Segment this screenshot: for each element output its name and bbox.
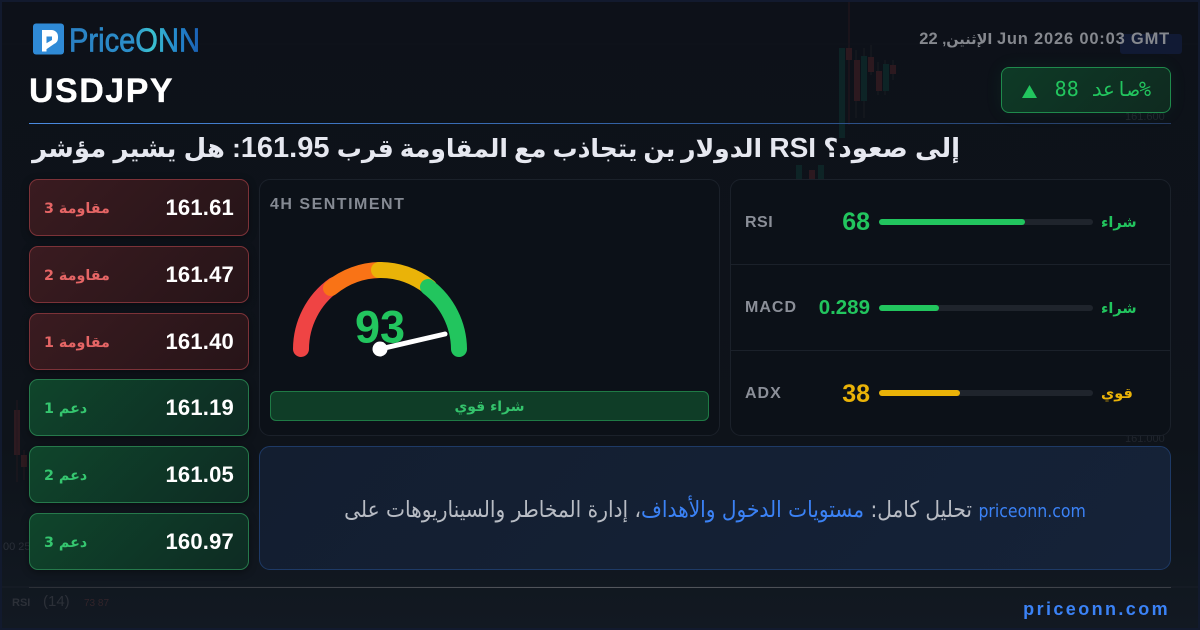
faint candlestick chart backdrop: 73 87 — [84, 598, 109, 609]
faint candlestick chart backdrop: 00 25 — [3, 541, 31, 553]
header divider — [29, 123, 1171, 124]
ADX row — [745, 380, 1133, 408]
footer divider — [29, 587, 1171, 588]
support 2: 161.05 — [166, 462, 234, 487]
ADX row: ADX — [745, 385, 782, 402]
resistance 2 — [29, 246, 249, 303]
resistance 1: 161.40 — [166, 329, 234, 354]
sentiment gauge — [293, 262, 467, 357]
MACD row: 0.289 — [819, 296, 870, 319]
panel: call to action — [259, 446, 1171, 570]
trend badge: %صاعد 88 — [1055, 77, 1151, 101]
support 3: 160.97 — [166, 529, 234, 554]
resistance 2: 161.47 — [166, 262, 234, 287]
resistance 1 — [29, 313, 249, 370]
support 1: 161.19 — [166, 395, 234, 420]
RSI row: 68 — [842, 208, 870, 236]
support 3 — [29, 513, 249, 570]
ADX row: 38 — [842, 380, 870, 408]
resistance 3 — [29, 179, 249, 236]
MACD row: MACD — [745, 299, 797, 316]
resistance 3: 161.61 — [166, 195, 234, 220]
panel: resistance and support levels — [28, 179, 249, 570]
support 3: دعم 3 — [44, 535, 87, 551]
gauge value: 93 — [355, 302, 405, 352]
sentiment label: strong buy — [270, 391, 709, 421]
support 1 — [29, 379, 249, 436]
support 2: دعم 2 — [44, 468, 87, 484]
resistance 1: مقاومة 1 — [44, 335, 110, 351]
date: 22 الإثنين, Jun 2026 00:03 GMT — [919, 30, 1170, 48]
MACD row — [731, 265, 1170, 351]
sentiment label: strong buy: شراء قوي — [454, 399, 525, 415]
footer url: priceonn.com — [1023, 599, 1170, 619]
ADX row: قوي — [1101, 386, 1133, 402]
support 1: دعم 1 — [44, 401, 87, 417]
RSI row — [731, 180, 1170, 265]
panel: 4H sentiment — [259, 179, 720, 436]
faint candlestick chart backdrop: RSI — [12, 597, 30, 609]
trend badge — [1001, 67, 1171, 113]
RSI row: RSI — [745, 214, 773, 231]
faint candlestick chart backdrop: 161.000 — [1125, 433, 1165, 445]
headline: إلى صعود؟ RSI الدولار ين يتجاذب مع المقاومة قرب 161.95: هل يشير مؤشر — [32, 132, 960, 164]
gauge needle — [372, 334, 445, 356]
resistance 3: مقاومة 3 — [44, 201, 110, 217]
faint candlestick chart backdrop: 161.600 — [1125, 111, 1165, 123]
call to action text: priceonn.com تحليل كامل: مستويات الدخول والأهداف، إدارة المخاطر والسيناريوهات على — [344, 497, 1086, 523]
resistance 2: مقاومة 2 — [44, 268, 110, 284]
panel: indicators — [730, 179, 1171, 436]
sentiment heading: 4H SENTIMENT — [270, 196, 405, 213]
faint candlestick chart backdrop: (14) — [43, 593, 70, 610]
symbol title: USDJPY — [29, 72, 174, 110]
RSI row: شراء — [1101, 215, 1137, 231]
MACD row: شراء — [1101, 301, 1137, 317]
support 2 — [29, 446, 249, 503]
